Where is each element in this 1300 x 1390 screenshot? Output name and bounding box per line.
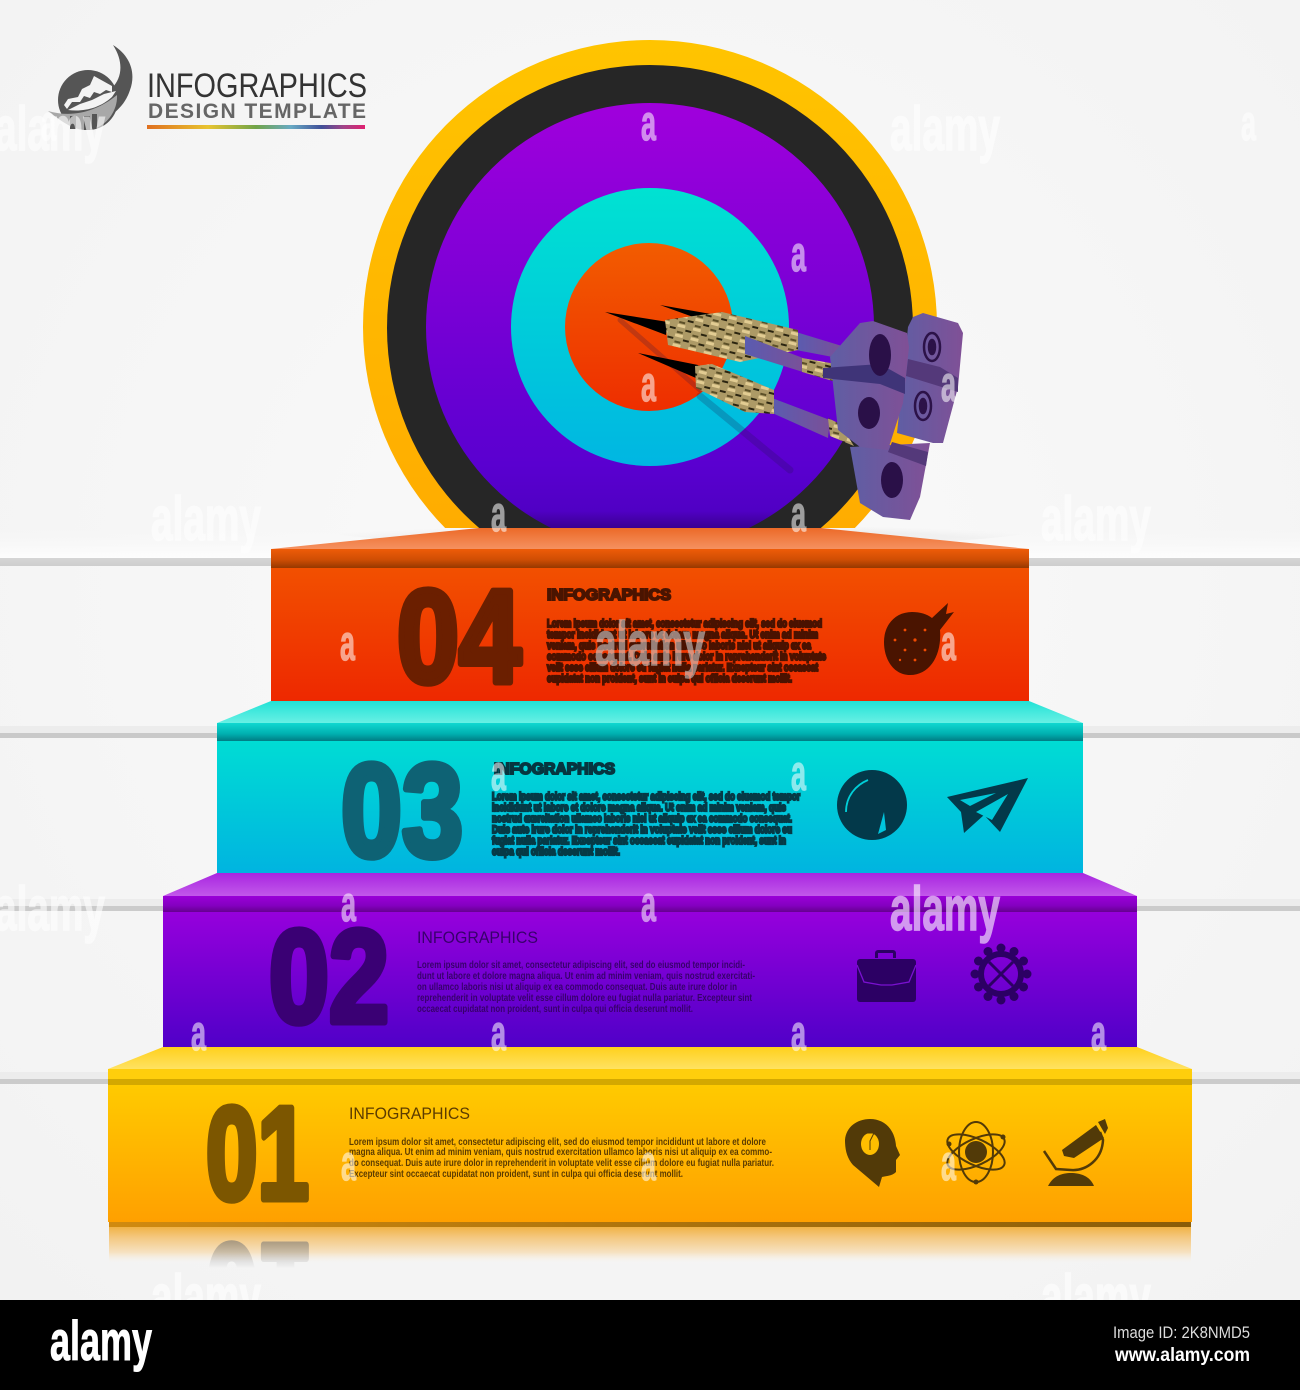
reflection under step 1 (109, 1222, 1191, 1265)
icon: globe (837, 770, 907, 840)
step 4 body text: commodo consequat. Duis aute irure dolor in reprehenderit in voluptate (547, 651, 826, 663)
step 1 body text: Lorem ipsum dolor sit amet, consectetur adipiscing elit, sed do eiusmod tempor incididunt ut labore et dolore (349, 1137, 766, 1148)
watermark: small a marks: a (791, 745, 807, 801)
dart flight target marks (915, 333, 940, 420)
watermark: small a marks (41, 95, 1257, 1191)
step 2 top surface (163, 873, 1137, 896)
darts (605, 305, 963, 520)
step 4 top band (271, 549, 1029, 568)
front dart flight (830, 321, 909, 450)
step 3: cyan (217, 701, 1083, 884)
step 4 body text: cupidatat non proident, sunt in culpa qui officia deserunt mollit. (547, 673, 792, 685)
step 4 number: 04 (397, 563, 521, 710)
step 3 body text: Duis aute irure dolor in reprehenderit in voluptate velit esse cillum dolore eu (492, 824, 792, 836)
step 3 body text: fugiat nulla pariatur. Excepteur sint occaecat cupidatat non proident, sunt in (492, 835, 786, 847)
watermark: large alamy marks: alamy (0, 875, 105, 944)
watermark: large alamy marks: alamy (151, 485, 261, 554)
flight bands (906, 359, 958, 392)
target board (363, 40, 937, 528)
step 1 heading: INFOGRAPHICS (349, 1104, 470, 1123)
watermark: small a marks: a (941, 1135, 957, 1191)
step 1 top surface (108, 1047, 1192, 1069)
watermark: large alamy marks: alamy (890, 95, 1000, 164)
logo icon (48, 45, 132, 130)
footer url: www.alamy.com (1114, 1345, 1250, 1366)
step 2 body text (417, 960, 755, 1015)
step 3 front (217, 741, 1083, 873)
step 2 body text: occaecat cupidatat non proident, sunt in culpa qui officia deserunt mollit. (417, 1004, 693, 1015)
step 3 top surface (217, 701, 1083, 723)
step 2 number: 02 (269, 903, 389, 1050)
watermark: large alamy marks: alamy (1041, 1263, 1151, 1332)
watermark: small a marks: a (341, 1135, 357, 1191)
purple ring (426, 103, 874, 551)
step 3 body text (492, 791, 801, 858)
step 2 heading: INFOGRAPHICS (417, 928, 538, 947)
step 2 body text: dunt ut labore et dolore magna aliqua. Ut enim ad minim veniam, quis nostrud exercitati- (417, 971, 755, 982)
step 1 body text (349, 1137, 774, 1180)
logo title: INFOGRAPHICS (147, 67, 367, 105)
step 1 top band (108, 1069, 1192, 1079)
cyan ring (511, 188, 789, 466)
watermark: small a marks: a (341, 876, 357, 932)
watermark: large alamy marks: alamy (595, 610, 705, 679)
watermark: small a marks: a (641, 95, 657, 151)
watermark: small a marks: a (491, 745, 507, 801)
watermark: small a marks: a (641, 1135, 657, 1191)
step 4 body text: Lorem ipsum dolor sit amet, consectetur adipiscing elit, sed do eiusmod (547, 618, 822, 630)
watermark: small a marks: a (1241, 95, 1257, 151)
logo subtitle: DESIGN TEMPLATE (148, 100, 366, 123)
icon: target with flame (884, 603, 954, 675)
step 1 body text: do consequat. Duis aute irure dolor in reprehenderit in voluptate velit esse cillum dolore eu fugiat nulla pariatur. (349, 1158, 774, 1169)
icon: head with lightbulb (845, 1119, 900, 1187)
step 3 top band (217, 723, 1083, 741)
watermark: large alamy marks: alamy (1041, 485, 1151, 554)
lower flight band (888, 442, 928, 466)
icon: microscope (1044, 1119, 1108, 1186)
lower dart collar (828, 418, 854, 446)
watermark: small a marks: a (941, 615, 957, 671)
red bullseye (565, 243, 733, 411)
watermark: large alamy marks: alamy (151, 1263, 261, 1332)
step 1 body text: Excepteur sint occaecat cupidatat non proident, sunt in culpa qui officia deserunt mollit. (349, 1169, 683, 1180)
dart shadows (620, 320, 790, 470)
step 2 front (163, 912, 1137, 1047)
step 2 body text: on ullamco laboris nisi ut aliquip ex ea commodo consequat. Duis aute irure dolor in (417, 982, 737, 993)
lower dart shaft (770, 398, 830, 438)
middle dart shaft (745, 336, 803, 372)
watermark: small a marks: a (1091, 1005, 1107, 1061)
shelf lines (0, 508, 1300, 1084)
step 3 body text: incididunt ut labore et dolore magna aliqua. Ut enim ad minim veniam, quis (492, 802, 786, 814)
footer image id: Image ID: 2K8NMD5 (1113, 1323, 1250, 1342)
watermark: small a marks: a (641, 356, 657, 412)
step 3 heading: INFOGRAPHICS (494, 761, 615, 778)
watermark: small a marks: a (340, 615, 356, 671)
step 2 body text: Lorem ipsum dolor sit amet, consectetur adipiscing elit, sed do eiusmod tempor incidi- (417, 960, 745, 971)
watermark: large alamy marks: alamy (890, 875, 1000, 944)
step 4 body text: veniam, quis nostrud exercitation ullamco laboris nisi ut aliquip ex ea (547, 640, 812, 652)
dart needles (605, 305, 722, 378)
logo: infographics design template (48, 45, 367, 130)
step 1 number: 01 (206, 1080, 309, 1227)
footer bar (0, 1300, 1300, 1390)
step 4 body text: tempor incididunt ut labore et dolore magna aliqua. Ut enim ad minim (547, 629, 818, 641)
watermark: small a marks: a (491, 486, 507, 542)
step 4 heading: INFOGRAPHICS (547, 587, 671, 604)
middle dart collar (802, 358, 836, 382)
back dart flights (897, 313, 963, 443)
watermark: small a marks: a (641, 876, 657, 932)
watermark: small a marks: a (791, 226, 807, 282)
watermark: large alamy marks (0, 95, 1151, 1332)
step 2: purple (163, 873, 1137, 1050)
footer logo: alamy (50, 1309, 152, 1372)
step 1 front (108, 1085, 1192, 1222)
step 4 top surface (271, 528, 1029, 549)
upper dart barrel (665, 312, 798, 362)
icon: briefcase (857, 950, 916, 1002)
step 1: yellow (108, 1047, 1192, 1265)
watermark: small a marks: a (791, 1005, 807, 1061)
step 4 front (271, 568, 1029, 701)
step 3 number: 03 (341, 737, 463, 884)
lower dart flight (850, 443, 930, 520)
step 2 body text: reprehenderit in voluptate velit esse cillum dolore eu fugiat nulla pariatur. Excepteur sint (417, 993, 753, 1004)
step 4 body text: velit esse cillum dolore eu fugiat nulla pariatur. Excepteur sint occaecat (547, 662, 818, 674)
upper dart shaft (796, 332, 842, 358)
flight dark spots (858, 334, 903, 498)
watermark: small a marks: a (791, 486, 807, 542)
rainbow bar (147, 125, 365, 129)
step 1 dark strip (108, 1079, 1192, 1085)
step 2 top band (163, 896, 1137, 912)
step 4 body text (547, 618, 826, 685)
reflection under step 1: 01 (206, 1217, 309, 1364)
step 3 body text: Lorem ipsum dolor sit amet, consectetur adipiscing elit, sed do eiusmod tempor (492, 791, 801, 803)
icon: gear (970, 944, 1032, 1004)
dark ring (387, 65, 913, 528)
icon: paper plane (947, 778, 1028, 833)
step 3 body text: culpa qui officia deserunt mollit. (492, 846, 620, 858)
step 3 body text: nostrud exercitation ullamco laboris nisi ut aliquip ex ea commodo consequat. (492, 813, 792, 825)
outer yellow ring (363, 40, 937, 528)
flight shaft (823, 364, 905, 394)
watermark: small a marks: a (491, 1005, 507, 1061)
step 1 body text: magna aliqua. Ut enim ad minim veniam, quis nostrud exercitation ullamco laboris nisi ut aliquip ex ea commo- (349, 1147, 772, 1158)
icon: atom (942, 1122, 1010, 1184)
watermark: large alamy marks: alamy (0, 95, 105, 164)
watermark: small a marks: a (41, 95, 57, 151)
step 4: orange (271, 528, 1029, 710)
watermark: small a marks: a (191, 1005, 207, 1061)
watermark: small a marks: a (941, 356, 957, 412)
lower dart barrel (695, 364, 774, 414)
